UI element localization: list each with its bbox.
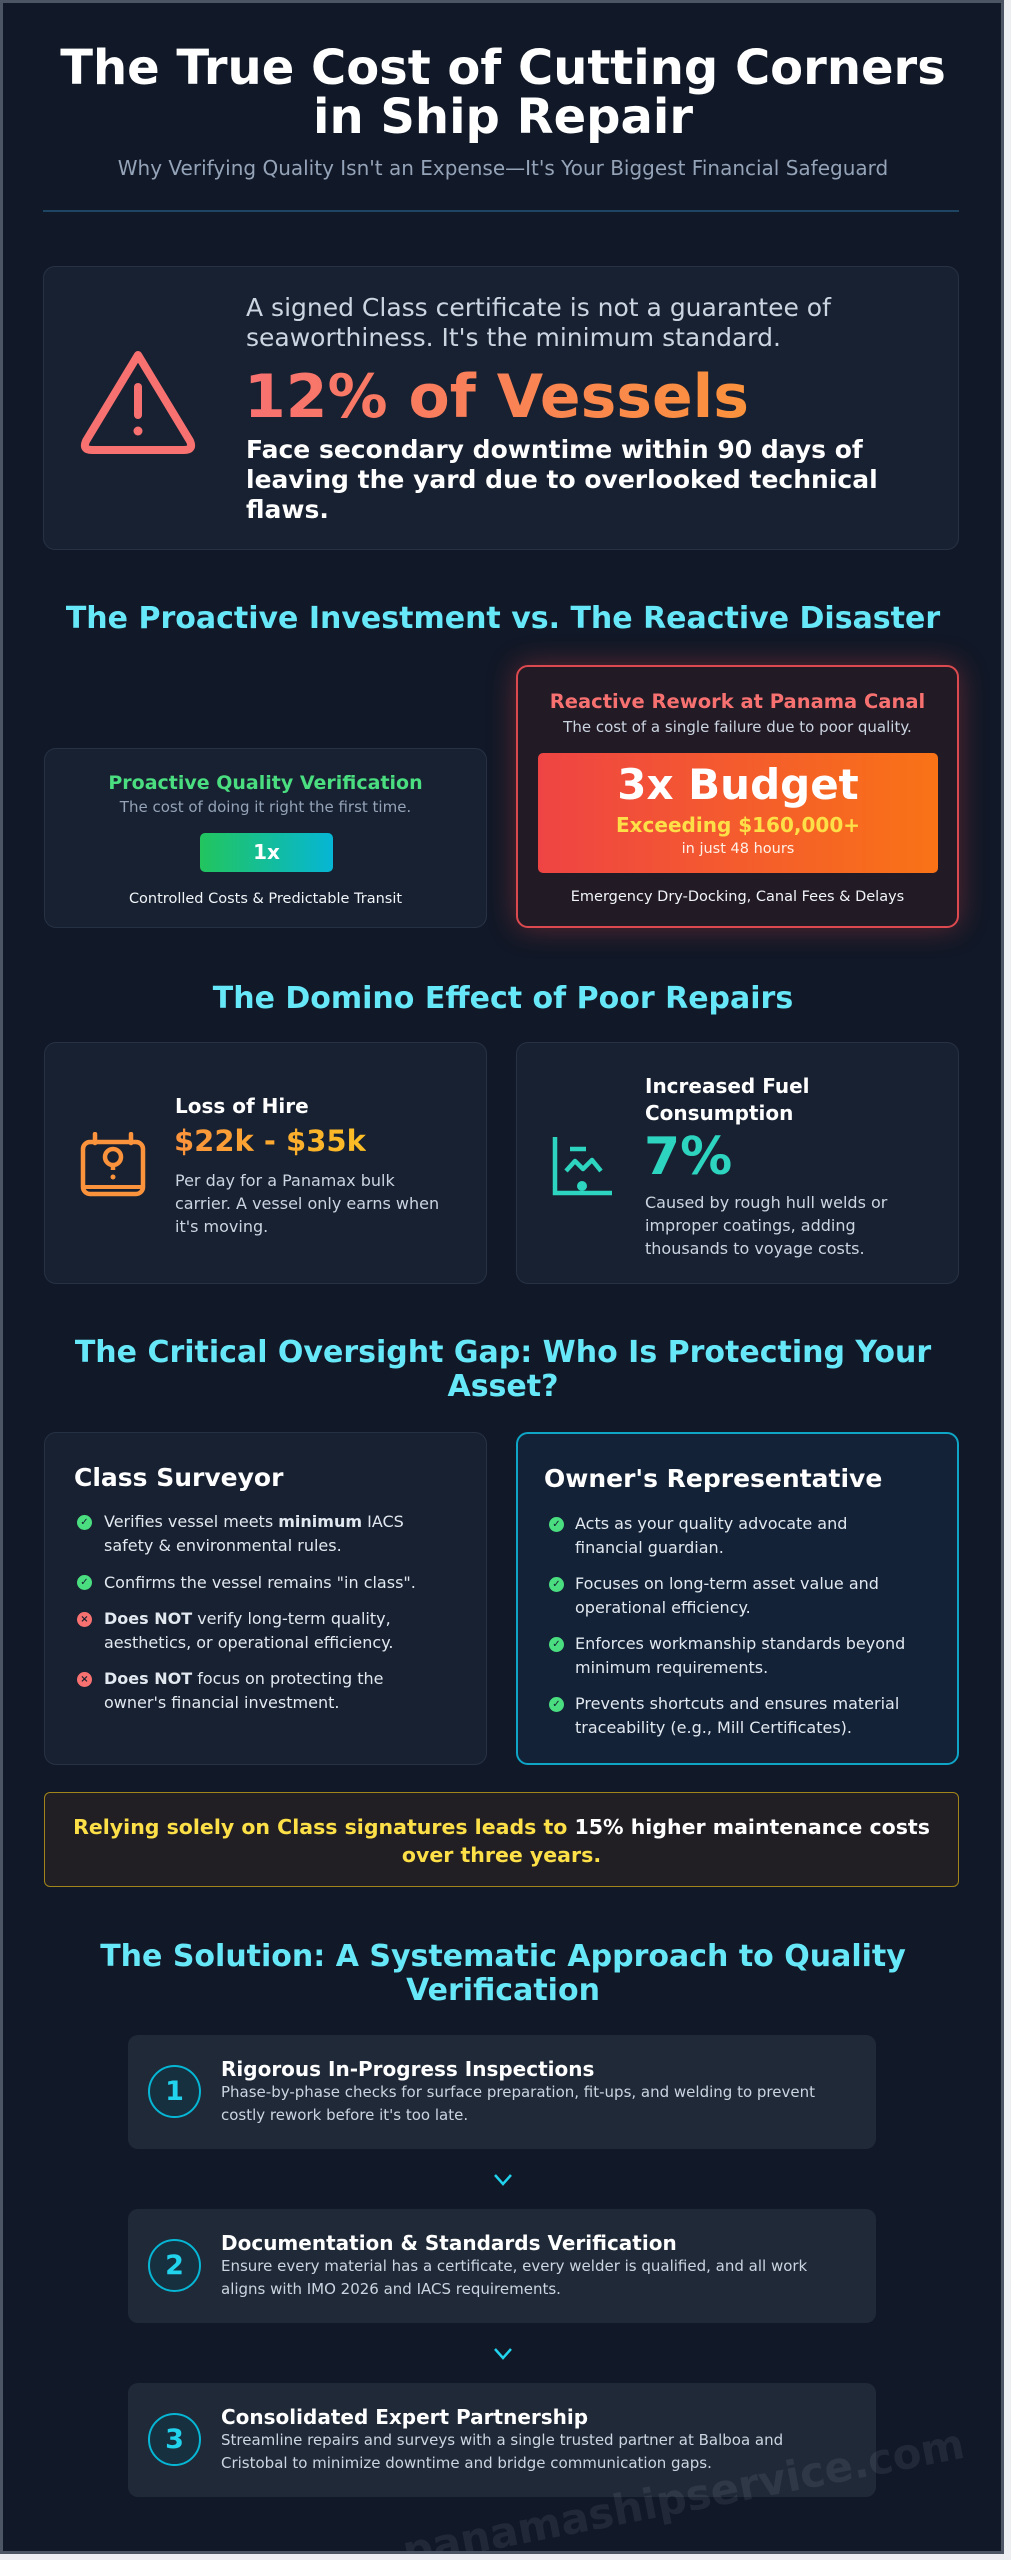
panel: reactive: Emergency Dry-Docking, Canal Fees & Delays: [571, 889, 904, 905]
panel: owner's representative: Acts as your quality advocate and: [575, 1514, 847, 1533]
heading: solution: The Solution: A Systematic Approach to Quality: [100, 1939, 906, 1974]
title: in Ship Repair: [313, 89, 693, 145]
arrow: [494, 2348, 512, 2360]
box: 3x budget: in just 48 hours: [682, 841, 794, 857]
panel: class surveyor: ✓: [80, 1517, 89, 1528]
stat: 12% of vessels: 12% of Vessels: [244, 362, 749, 432]
panel: loss of hire: [44, 1042, 487, 1284]
arrow: [494, 2174, 512, 2186]
panel: reactive: Reactive Rework at Panama Canal: [550, 690, 925, 713]
panel: class surveyor: owner's financial investment.: [104, 1693, 339, 1712]
panel: owner's representative: financial guardian.: [575, 1538, 724, 1557]
step 1: [128, 2035, 876, 2149]
panel: class surveyor: Confirms the vessel remains "in class".: [104, 1573, 416, 1592]
step 3: Consolidated Expert Partnership: [221, 2405, 588, 2429]
panel: class surveyor: ✓: [80, 1577, 89, 1588]
badge: 1x: 1x: [253, 840, 280, 864]
box: 3x budget: 3x Budget: [617, 760, 859, 809]
panel: owner's representative: Prevents shortcuts and ensures material: [575, 1694, 899, 1713]
step 3: [128, 2383, 876, 2497]
panel: owner's representative: ✓: [552, 1579, 561, 1590]
heading: oversight gap: Asset?: [447, 1369, 559, 1404]
icon: chart: [552, 1137, 612, 1196]
step 3: Cristobal to minimize downtime and bridge communication gaps.: [221, 2454, 712, 2472]
heading: domino effect: The Domino Effect of Poor Repairs: [213, 981, 793, 1016]
step 1: 1: [165, 2076, 184, 2107]
panel: class surveyor: [44, 1432, 487, 1765]
panel: fuel consumption: Caused by rough hull welds or: [645, 1193, 887, 1212]
subtitle: Why Verifying Quality Isn't an Expense—It's Your Biggest Financial Safeguard: [118, 156, 888, 180]
step 3: Streamline repairs and surveys with a single trusted partner at Balboa and: [221, 2431, 783, 2449]
step 2: Ensure every material has a certificate, every welder is qualified, and all work: [221, 2257, 807, 2275]
text: intro: A signed Class certificate is not a guarantee of: [246, 293, 831, 322]
panel: proactive: Controlled Costs & Predictable Transit: [129, 891, 402, 907]
box: 3x budget: [538, 753, 938, 873]
panel: owner's representative: ✓: [552, 1699, 561, 1710]
panel: loss of hire: Loss of Hire: [175, 1094, 309, 1118]
text: downtime: leaving the yard due to overlooked technical: [246, 465, 878, 494]
panel: fuel consumption: thousands to voyage costs.: [645, 1239, 865, 1258]
step 2: aligns with IMO 2026 and IACS requirements.: [221, 2280, 561, 2298]
step 2: 2: [165, 2250, 184, 2281]
panel: class surveyor: ×: [80, 1614, 89, 1625]
step 2: [128, 2209, 876, 2323]
panel: owner's representative: traceability (e.g., Mill Certificates).: [575, 1718, 852, 1737]
callout: maintenance costs: over three years.: [402, 1843, 601, 1867]
step 2: Documentation & Standards Verification: [221, 2231, 677, 2255]
title: [60, 40, 946, 145]
badge: 1x: [200, 833, 333, 872]
step 3: 3: [165, 2424, 184, 2455]
panel: class surveyor: Class Surveyor: [74, 1463, 283, 1492]
panel: class surveyor: aesthetics, or operational efficiency.: [104, 1633, 393, 1652]
panel: owner's representative: ✓: [552, 1519, 561, 1530]
panel: class surveyor: Does NOT verify long-term quality,: [104, 1609, 391, 1628]
panel: alert: [43, 266, 959, 550]
panel: owner's representative: operational efficiency.: [575, 1598, 751, 1617]
box: 3x budget: Exceeding $160,000+: [616, 813, 860, 837]
panel: class surveyor: Verifies vessel meets minimum IACS: [104, 1512, 404, 1531]
panel: reactive: [516, 665, 959, 928]
panel: owner's representative: Owner's Representative: [544, 1464, 882, 1493]
title: The True Cost of Cutting Corners: [60, 40, 946, 96]
stat: loss of hire: $22k - $35k: [174, 1124, 366, 1158]
text: intro: [246, 293, 832, 352]
heading: oversight gap: [75, 1335, 932, 1404]
panel: class surveyor: safety & environmental rules.: [104, 1536, 342, 1555]
panel: proactive: Proactive Quality Verification: [108, 772, 423, 794]
panel: proactive: [44, 748, 487, 928]
panel: proactive: The cost of doing it right the first time.: [120, 798, 411, 816]
step 1: Rigorous In-Progress Inspections: [221, 2057, 594, 2081]
panel: loss of hire: carrier. A vessel only earns when: [175, 1194, 439, 1213]
step 1: costly rework before it's too late.: [221, 2106, 468, 2124]
panel: owner's representative: minimum requirements.: [575, 1658, 768, 1677]
panel: owner's representative: Focuses on long-term asset value and: [575, 1574, 879, 1593]
text: intro: seaworthiness. It's the minimum standard.: [246, 323, 781, 352]
heading: oversight gap: The Critical Oversight Gap: Who Is Protecting Your: [75, 1335, 931, 1370]
panel: fuel consumption: Increased Fuel: [645, 1074, 810, 1098]
step 1: Phase-by-phase checks for surface preparation, fit-ups, and welding to prevent: [221, 2083, 815, 2101]
panel: fuel consumption: improper coatings, adding: [645, 1216, 856, 1235]
panel: reactive: The cost of a single failure due to poor quality.: [563, 718, 912, 736]
heading: solution: Verification: [406, 1973, 600, 2008]
panel: owner's representative: Enforces workmanship standards beyond: [575, 1634, 905, 1653]
icon: warning: [80, 351, 196, 454]
icon: calendar: [80, 1132, 146, 1196]
text: downtime: [246, 435, 878, 524]
text: downtime: Face secondary downtime within 90 days of: [246, 435, 863, 464]
panel: fuel consumption: [516, 1042, 959, 1284]
panel: owner's representative: [516, 1432, 959, 1765]
panel: fuel consumption: Consumption: [645, 1101, 793, 1125]
panel: class surveyor: ×: [80, 1674, 89, 1685]
panel: owner's representative: ✓: [552, 1639, 561, 1650]
callout: maintenance costs: [44, 1792, 959, 1887]
heading: solution: [100, 1939, 906, 2008]
callout: maintenance costs: Relying solely on Class signatures leads to 15% higher maintenance costs: [73, 1815, 930, 1839]
panel: class surveyor: Does NOT focus on protecting the: [104, 1669, 383, 1688]
text: downtime: flaws.: [246, 495, 329, 524]
stat: 7%: 7%: [644, 1127, 732, 1187]
heading: proactive vs reactive: The Proactive Investment vs. The Reactive Disaster: [66, 601, 940, 636]
panel: loss of hire: Per day for a Panamax bulk: [175, 1171, 395, 1190]
panel: loss of hire: it's moving.: [175, 1217, 268, 1236]
